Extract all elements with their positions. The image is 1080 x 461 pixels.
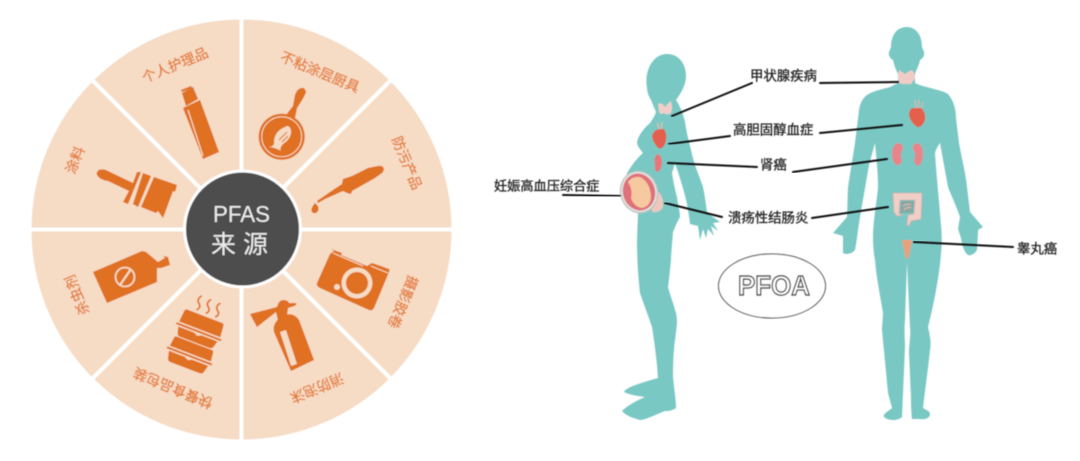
panel: pesticides: 杀虫剂	[62, 273, 92, 317]
organ: intestine	[893, 193, 922, 226]
panel: photographic film: 摄影胶卷	[385, 273, 421, 331]
panel: firefighting foam	[242, 230, 391, 442]
PFOA oval badge: PFOA	[738, 270, 810, 301]
label: pregnancy hypertension: 妊娠高血压综合症	[494, 178, 600, 194]
label: kidney cancer: 肾癌	[760, 158, 787, 172]
panel: firefighting foam: 消防泡沫	[288, 370, 346, 406]
organ: kidneys	[892, 143, 923, 166]
label: testicular cancer	[914, 242, 1057, 256]
organ: kidney	[654, 154, 662, 172]
organ: uterus with fetus	[616, 167, 663, 217]
center circle: PFAS	[213, 201, 270, 227]
PFOA oval badge	[718, 254, 826, 318]
panel: paints	[30, 80, 242, 229]
label: thyroid disease: 甲状腺疾病	[750, 68, 817, 84]
male body figure	[833, 27, 983, 420]
panel: photographic film	[242, 230, 454, 379]
label: high cholesterol	[669, 122, 902, 144]
panel: pesticides	[30, 230, 242, 379]
PFAS sources wheel	[30, 18, 454, 442]
label: pregnancy hypertension	[494, 178, 620, 196]
panel: non-stick cookware	[242, 18, 391, 230]
panel: fast food packaging: 快餐食品包装	[131, 365, 215, 411]
organ: thyroid	[658, 101, 672, 114]
label: high cholesterol: 高胆固醇血症	[733, 122, 813, 138]
organ: thyroid	[898, 70, 915, 84]
label: testicular cancer: 睾丸癌	[1017, 242, 1057, 256]
panel: stain-proof products: 防污产品	[389, 134, 425, 192]
center circle: 来 源	[211, 231, 268, 259]
female body figure	[616, 54, 720, 420]
silhouette: man	[833, 27, 983, 420]
center circle	[184, 171, 300, 287]
panel: stain-proof products	[242, 80, 454, 229]
organ: testis	[902, 240, 912, 259]
panel: paints: 涂料	[62, 144, 88, 176]
label: ulcerative colitis	[665, 203, 888, 226]
label: kidney cancer	[668, 158, 887, 172]
silhouette: pregnant woman	[622, 54, 720, 420]
panel: personal care products	[92, 18, 241, 230]
label: thyroid disease	[672, 68, 898, 116]
label: ulcerative colitis: 溃疡性结肠炎	[728, 210, 808, 226]
organ: heart	[652, 122, 666, 148]
panel: fast food packaging	[92, 230, 241, 442]
panel: non-stick cookware: 不粘涂层厨具	[278, 49, 362, 95]
organ: heart	[909, 100, 925, 127]
panel: personal care products: 个人护理品	[140, 44, 210, 86]
